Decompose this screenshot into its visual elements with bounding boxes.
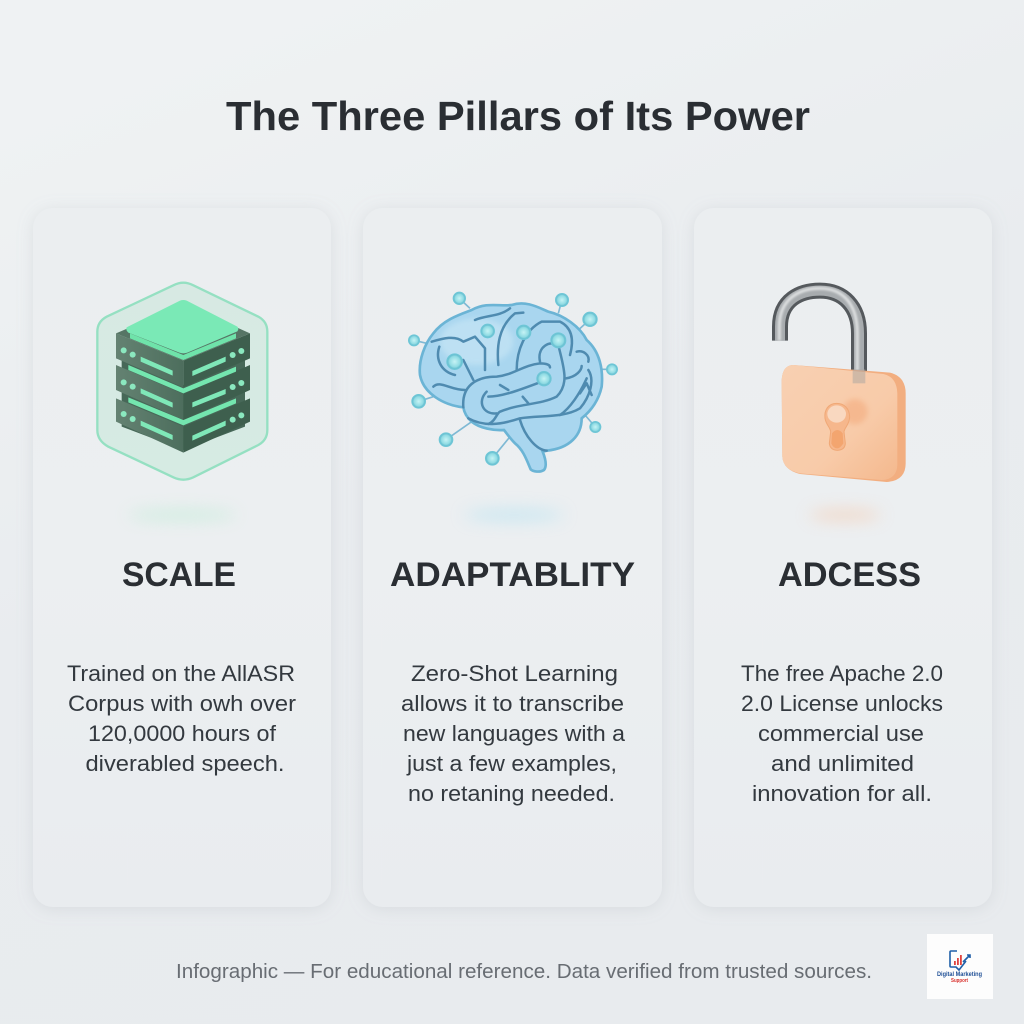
text: adaptability description: no retaning needed.: [408, 781, 615, 806]
heading: access: ADCESS: [778, 556, 921, 594]
glow: adaptability: [464, 509, 564, 521]
heading: scale: SCALE: [122, 556, 236, 594]
text: scale description: [67, 661, 296, 776]
icon: neural brain: [409, 292, 617, 472]
text: access description: The free Apache 2.0: [741, 661, 943, 686]
text: scale description: diverabled speech.: [86, 751, 284, 776]
icon: server stack in hexagon: [97, 283, 267, 480]
title: The Three Pillars of Its Power: [226, 93, 810, 139]
logo: Digital Marketing Support: [927, 934, 993, 999]
panel: adaptability: [363, 208, 662, 907]
text: access description: 2.0 License unlocks: [741, 691, 943, 716]
text: access description: and unlimited: [771, 751, 914, 776]
text: access description: commercial use: [758, 721, 924, 746]
heading: adaptability: ADAPTABLITY: [390, 556, 635, 594]
footer note: Infographic — For educational reference. Data verified from trusted sources.: [176, 961, 872, 983]
text: scale description: Corpus with owh over: [68, 691, 296, 716]
text: adaptability description: Zero-Shot Learning: [411, 661, 618, 686]
text: access description: innovation for all.: [752, 781, 932, 806]
text: scale description: Trained on the AllASR: [67, 661, 295, 686]
text: adaptability description: just a few examples,: [406, 751, 617, 776]
text: scale description: 120,0000 hours of: [88, 721, 277, 746]
panel: access: [694, 208, 992, 907]
text: access description: [741, 661, 943, 806]
text: adaptability description: [401, 661, 626, 806]
text: adaptability description: allows it to transcribe: [401, 691, 624, 716]
glow: access: [809, 510, 881, 520]
glow: scale: [127, 509, 237, 521]
logo: Digital Marketing Support: Support: [951, 978, 968, 984]
logo: Digital Marketing Support: Digital Marketing: [937, 971, 982, 978]
panel: scale: [33, 208, 331, 907]
text: adaptability description: new languages with a: [403, 721, 626, 746]
icon: open padlock: [779, 288, 906, 482]
